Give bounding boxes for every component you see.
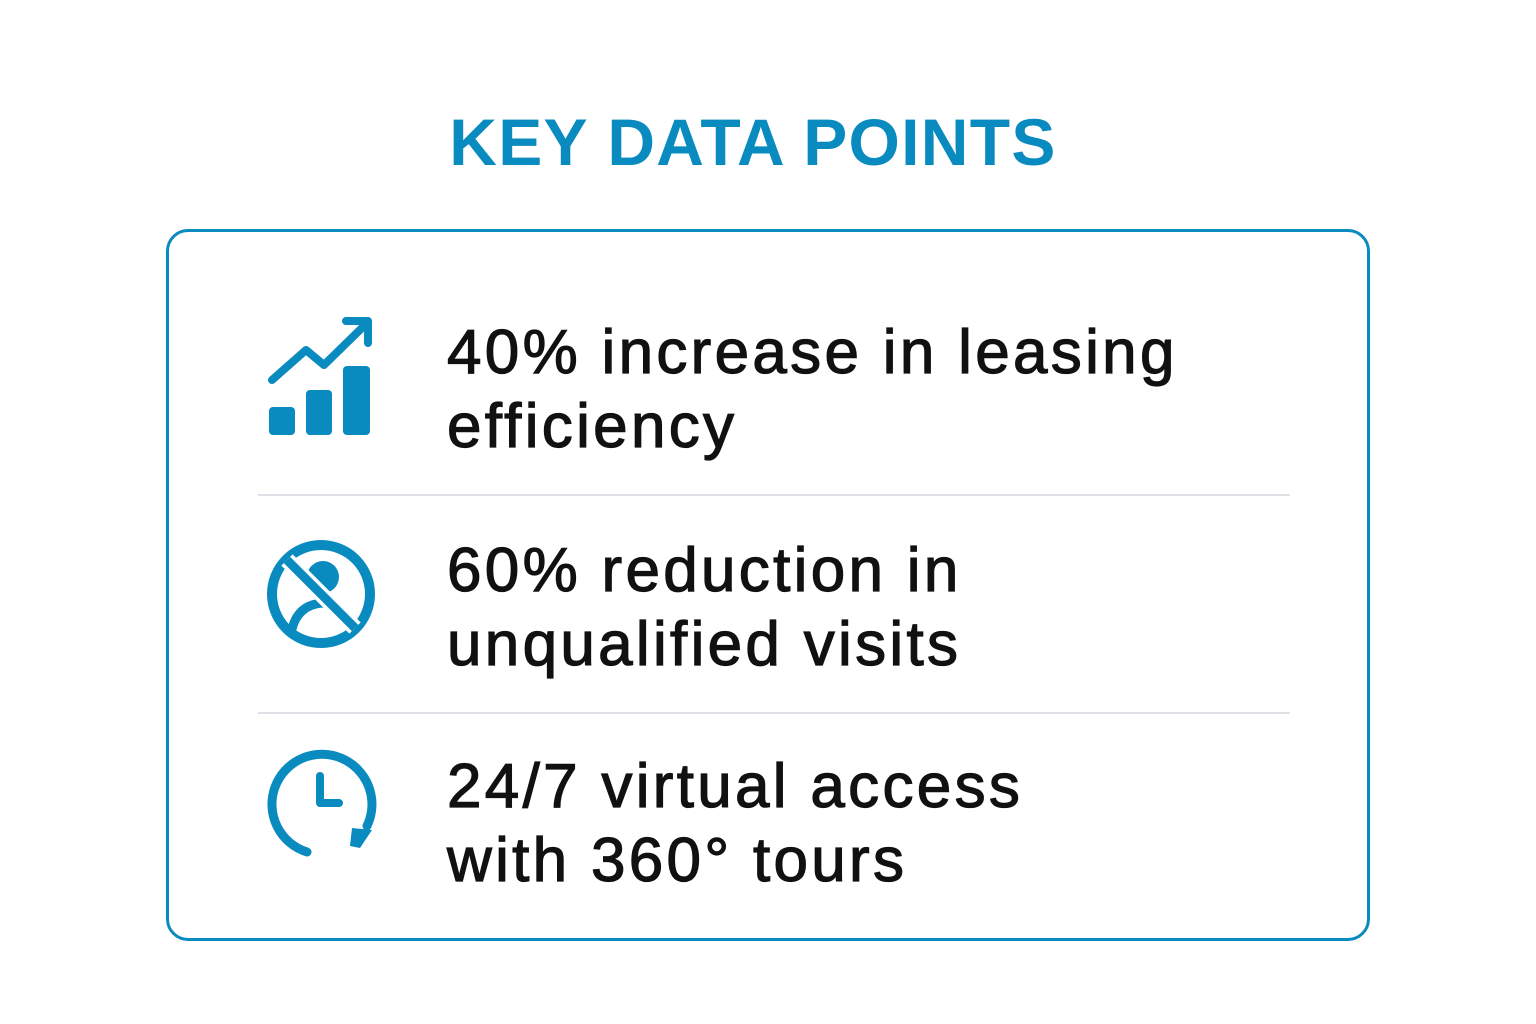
text: virtual access: 24/7 virtual access bbox=[447, 752, 1023, 821]
panel: data points bbox=[166, 229, 1370, 941]
icon: growth chart bbox=[268, 317, 372, 435]
text: leasing efficiency bbox=[447, 318, 1178, 461]
text: unqualified visits: 60% reduction in bbox=[447, 536, 962, 605]
text: unqualified visits: unqualified visits bbox=[447, 610, 961, 679]
text: leasing efficiency: 40% increase in leasing bbox=[447, 318, 1178, 387]
icon: no person bbox=[267, 540, 375, 648]
text: unqualified visits bbox=[447, 536, 962, 679]
text: virtual access: with 360° tours bbox=[447, 826, 907, 895]
title: KEY DATA POINTS bbox=[449, 105, 1057, 179]
icon: clock 24/7 bbox=[267, 750, 376, 856]
text: leasing efficiency: efficiency bbox=[447, 392, 737, 461]
text: virtual access bbox=[446, 752, 1023, 895]
